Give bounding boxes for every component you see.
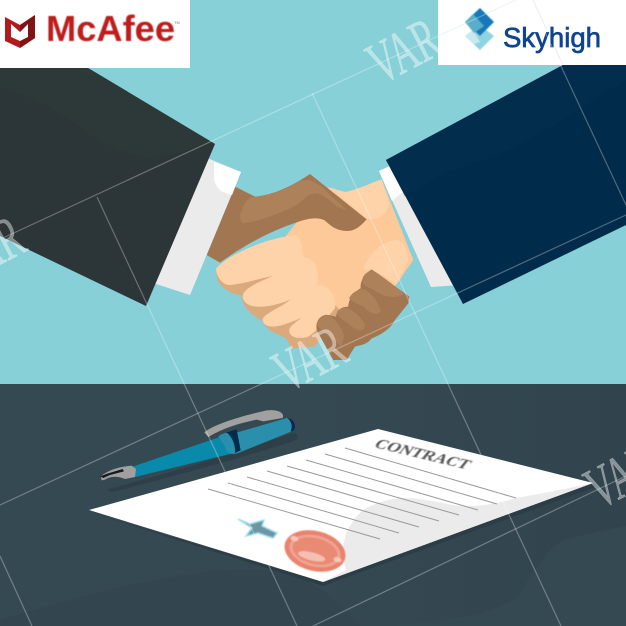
right cuff (379, 165, 460, 287)
dark hand (207, 174, 367, 263)
contract heading: CONTRACT (370, 437, 474, 473)
signature (238, 519, 277, 538)
light arm (267, 179, 413, 327)
left sleeve (0, 68, 215, 306)
pen (100, 410, 298, 492)
contract paper (89, 429, 593, 582)
paper shadow (89, 483, 598, 586)
sky background (0, 0, 626, 384)
trademark: TM (174, 20, 180, 25)
pen nib (101, 466, 136, 480)
right sleeve (386, 65, 626, 304)
watermark text: VAR (263, 313, 357, 405)
icon: Skyhigh diamonds (465, 8, 494, 50)
McAfee logo panel (0, 0, 190, 68)
dark fingers (316, 269, 409, 360)
pen barrel (133, 433, 235, 477)
fingers (216, 235, 335, 338)
fingers shadow (216, 270, 340, 348)
paper shading (323, 483, 593, 582)
red stamp (280, 524, 350, 578)
handshake (207, 174, 413, 360)
pen cap (218, 418, 293, 454)
Skyhigh logo panel (438, 0, 626, 65)
Skyhigh wordmark: Skyhigh (503, 22, 601, 53)
McAfee wordmark: McAfee (46, 8, 175, 49)
pen shadow (107, 433, 298, 492)
contract text lines (208, 448, 516, 539)
pen clip (204, 410, 283, 437)
faint watermark lines on panel (438, 0, 563, 65)
icon: McAfee shield (5, 15, 35, 48)
table background (0, 384, 626, 626)
left cuff (150, 157, 241, 295)
